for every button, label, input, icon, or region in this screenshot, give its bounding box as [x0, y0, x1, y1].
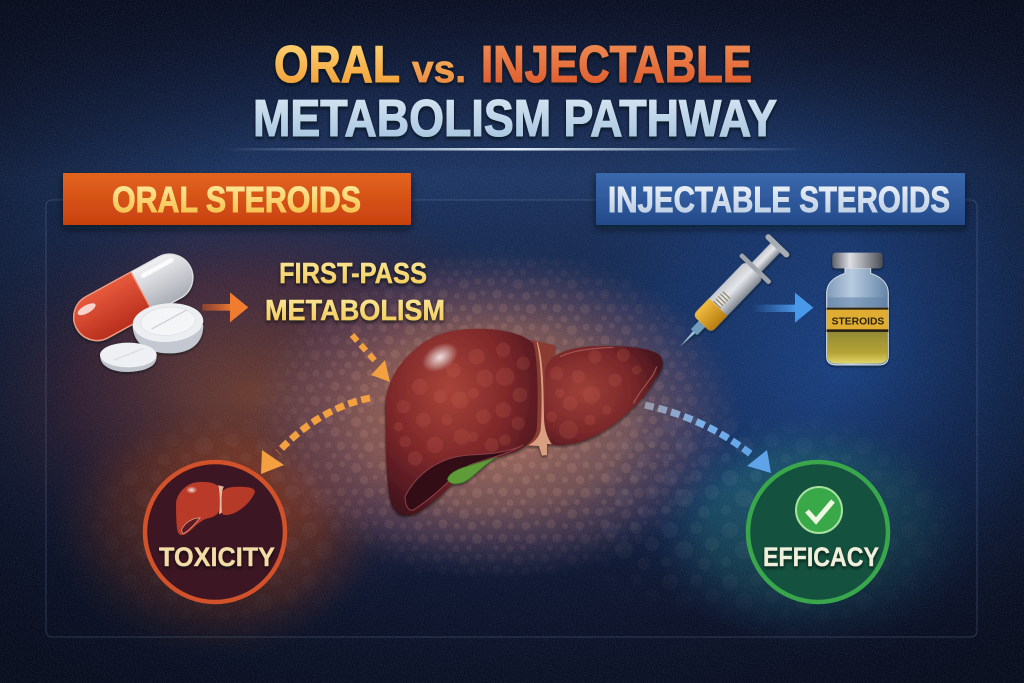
plunger rod — [747, 242, 782, 277]
liver cell texture — [394, 343, 641, 466]
label: first-pass metabolism — [265, 258, 445, 327]
bridge between lobes — [527, 340, 557, 456]
barrel — [693, 261, 763, 333]
highlight — [417, 337, 463, 378]
under-fold — [405, 445, 523, 510]
panel frame — [46, 200, 977, 637]
arrow: first-pass to liver — [352, 335, 390, 382]
needle — [679, 328, 698, 348]
fluid — [693, 298, 727, 333]
ribbon: oral steroids — [63, 173, 411, 225]
arrow: liver to efficacy — [645, 405, 771, 473]
badge: toxicity — [145, 462, 285, 602]
icon: capsule and tablets — [65, 246, 205, 372]
right lobe rim — [560, 347, 657, 403]
arrow: syringe to vial — [752, 293, 813, 323]
vial glass — [827, 268, 888, 365]
icon: liver — [385, 329, 663, 516]
arrow: liver to toxicity — [261, 398, 370, 474]
small tablet — [100, 343, 157, 372]
icon: steroid vial — [827, 253, 888, 365]
title line 2: METABOLISM PATHWAY — [253, 90, 777, 148]
efficacy label: EFFICACY — [763, 542, 879, 572]
title line 1: oral: ORAL — [274, 36, 400, 94]
title line 1: vs.: vs. — [412, 49, 466, 91]
arrow: pills to first-pass — [202, 292, 248, 322]
badge: efficacy — [748, 462, 888, 602]
title rule — [220, 148, 810, 150]
icon: small liver — [176, 482, 255, 535]
markings — [714, 292, 730, 308]
icon: syringe — [665, 229, 794, 361]
barrel flange — [739, 253, 772, 285]
capsule — [65, 246, 201, 349]
toxicity label: TOXICITY — [159, 542, 275, 572]
title line 1: injectable: INJECTABLE — [481, 36, 752, 94]
title — [253, 36, 777, 148]
cap — [832, 253, 883, 268]
plunger flange — [764, 233, 790, 259]
hub — [691, 320, 706, 335]
falciform ligament — [528, 342, 552, 456]
gallbladder — [447, 457, 497, 484]
liquid — [828, 297, 887, 363]
left lobe — [385, 329, 538, 516]
ribbon: injectable steroids — [596, 173, 965, 225]
first-pass: FIRST-PASS — [279, 258, 427, 290]
ribbon label: oral steroids: ORAL STEROIDS — [112, 179, 361, 220]
large tablet — [131, 301, 205, 353]
right lobe — [544, 346, 663, 446]
icon: check mark — [796, 487, 842, 533]
label text: STEROIDS — [832, 316, 885, 327]
ribbon label: injectable steroids: INJECTABLE STEROIDS — [608, 179, 950, 220]
metabolism: METABOLISM — [265, 295, 445, 327]
